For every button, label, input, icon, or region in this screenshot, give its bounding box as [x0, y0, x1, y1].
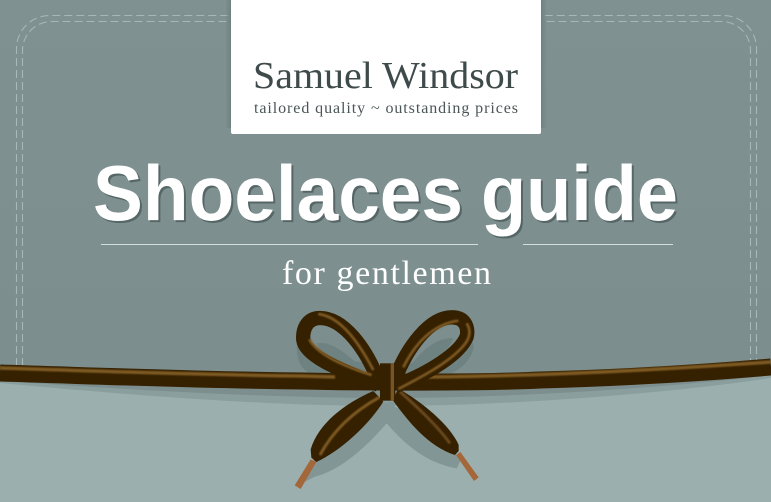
left aglet — [295, 459, 316, 489]
logo card — [225, 0, 547, 134]
shoelace bow — [0, 314, 771, 489]
right aglet — [456, 452, 479, 481]
right loop — [395, 317, 467, 386]
stitching — [16, 15, 756, 366]
straight lace — [0, 362, 771, 382]
right tail — [393, 389, 459, 455]
bow loops, tails and knot — [295, 314, 479, 489]
title — [93, 149, 680, 239]
title: guide — [481, 149, 678, 237]
title: Shoelaces — [93, 149, 463, 237]
title: guide — [483, 151, 680, 239]
brand name: Samuel Windsor — [253, 55, 518, 97]
left loop — [303, 318, 378, 385]
subtitle: for gentlemen — [282, 255, 491, 292]
title underline — [101, 244, 673, 246]
lower panel — [0, 375, 771, 502]
left tail — [311, 391, 383, 462]
title: Shoelaces — [95, 151, 465, 239]
knot — [380, 363, 395, 401]
brand tagline: tailored quality ~ outstanding prices — [254, 100, 518, 117]
lace shadows — [297, 333, 474, 482]
